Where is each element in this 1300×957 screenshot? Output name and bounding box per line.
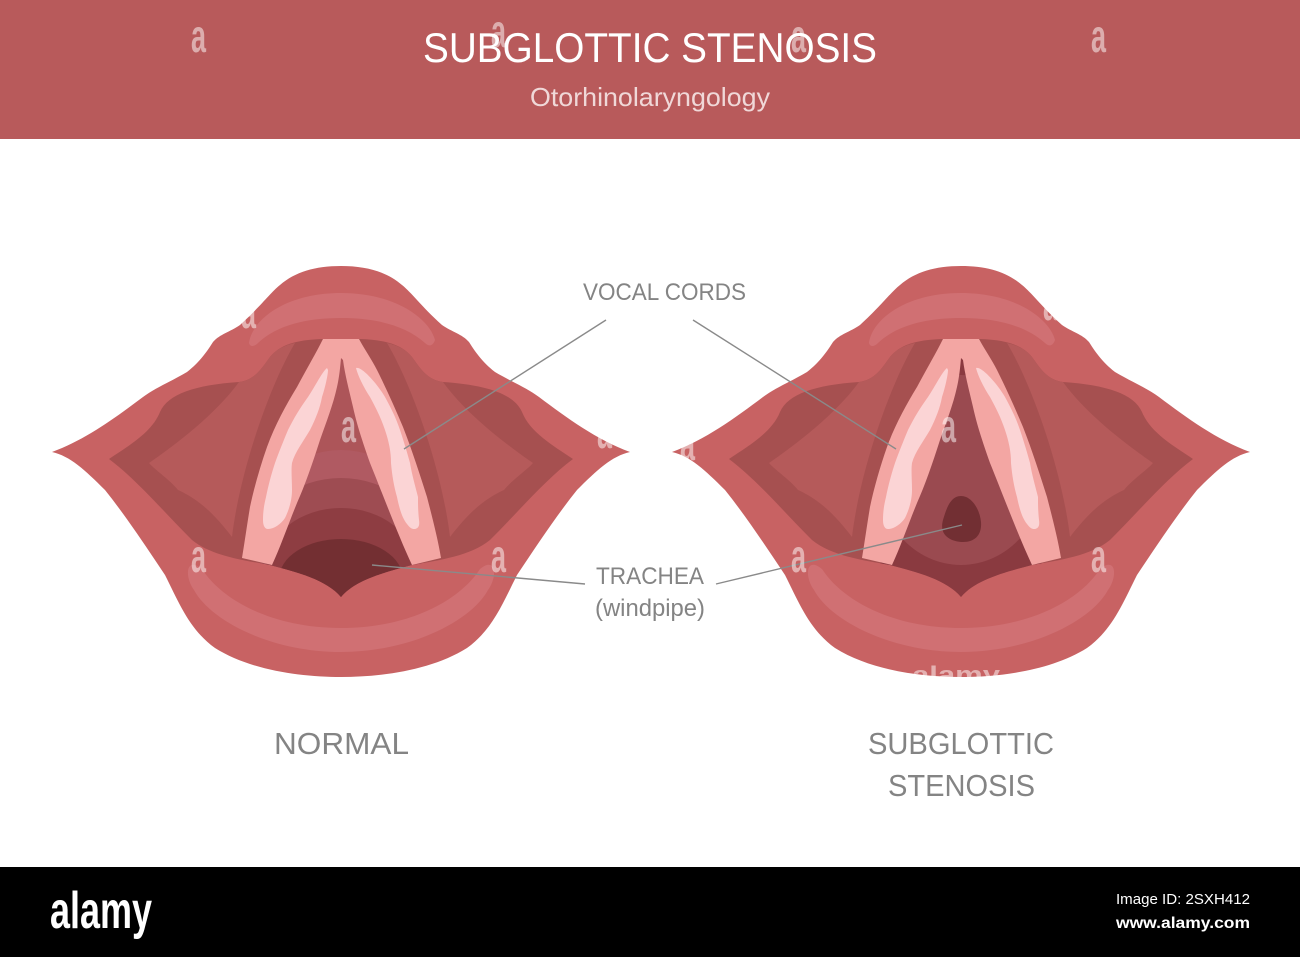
watermark marks: a — [941, 400, 956, 452]
outer tissue — [672, 266, 1250, 677]
left cord highlight — [883, 368, 948, 529]
upper lip highlight — [869, 293, 1055, 346]
watermark marks: a — [491, 5, 506, 57]
left cord highlight — [263, 368, 328, 529]
watermark marks: a — [491, 530, 506, 582]
vocal cords — [862, 339, 1061, 565]
lower lip highlight — [808, 565, 1114, 652]
label: trachea: TRACHEA — [596, 563, 704, 590]
watermark marks — [191, 5, 1106, 689]
watermark marks: alamy — [912, 662, 1001, 689]
left side panel — [769, 343, 915, 537]
outer tissue — [52, 266, 630, 677]
website: www.alamy.com — [1115, 915, 1250, 932]
watermark marks: a — [1091, 10, 1106, 62]
narrowed airway — [880, 358, 1042, 597]
dark cavity — [729, 339, 1193, 597]
watermark marks: a — [791, 530, 806, 582]
upper lip highlight — [249, 293, 435, 346]
right cord highlight — [356, 368, 419, 529]
watermark marks: a — [341, 400, 356, 452]
footer bar — [0, 867, 1300, 957]
watermark marks: a — [191, 530, 206, 582]
subtitle: Otorhinolaryngology — [530, 82, 770, 112]
watermark marks: a — [597, 406, 612, 458]
watermark marks: a — [1043, 278, 1058, 330]
watermark marks: a — [191, 10, 206, 62]
caption: subglottic stenosis: STENOSIS — [888, 768, 1035, 803]
figure: normal larynx — [52, 266, 630, 677]
label: windpipe: (windpipe) — [595, 595, 705, 622]
leader lines — [372, 320, 962, 584]
dark cavity — [109, 339, 573, 597]
right side panel — [1007, 343, 1153, 537]
watermark marks: a — [791, 10, 806, 62]
left side panel — [149, 343, 295, 537]
stenotic opening — [942, 496, 981, 542]
watermark marks: a — [241, 286, 256, 338]
label: vocal cords: VOCAL CORDS — [583, 279, 746, 306]
image id: Image ID: 2SXH412 — [1116, 891, 1250, 908]
caption: subglottic stenosis: SUBGLOTTIC — [868, 726, 1054, 761]
right side panel — [387, 343, 533, 537]
footer logo: alamy — [50, 882, 152, 940]
lower lip highlight — [188, 565, 494, 652]
trachea rings — [260, 358, 422, 597]
watermark marks: a — [680, 418, 695, 470]
watermark marks: a — [1091, 530, 1106, 582]
right cord highlight — [976, 368, 1039, 529]
vocal cords — [242, 339, 441, 565]
caption: normal: NORMAL — [274, 726, 409, 761]
figure: subglottic stenosis larynx — [672, 266, 1250, 677]
header banner — [0, 0, 1300, 139]
title: SUBGLOTTIC STENOSIS — [423, 24, 877, 71]
caption: subglottic stenosis — [868, 726, 1054, 803]
